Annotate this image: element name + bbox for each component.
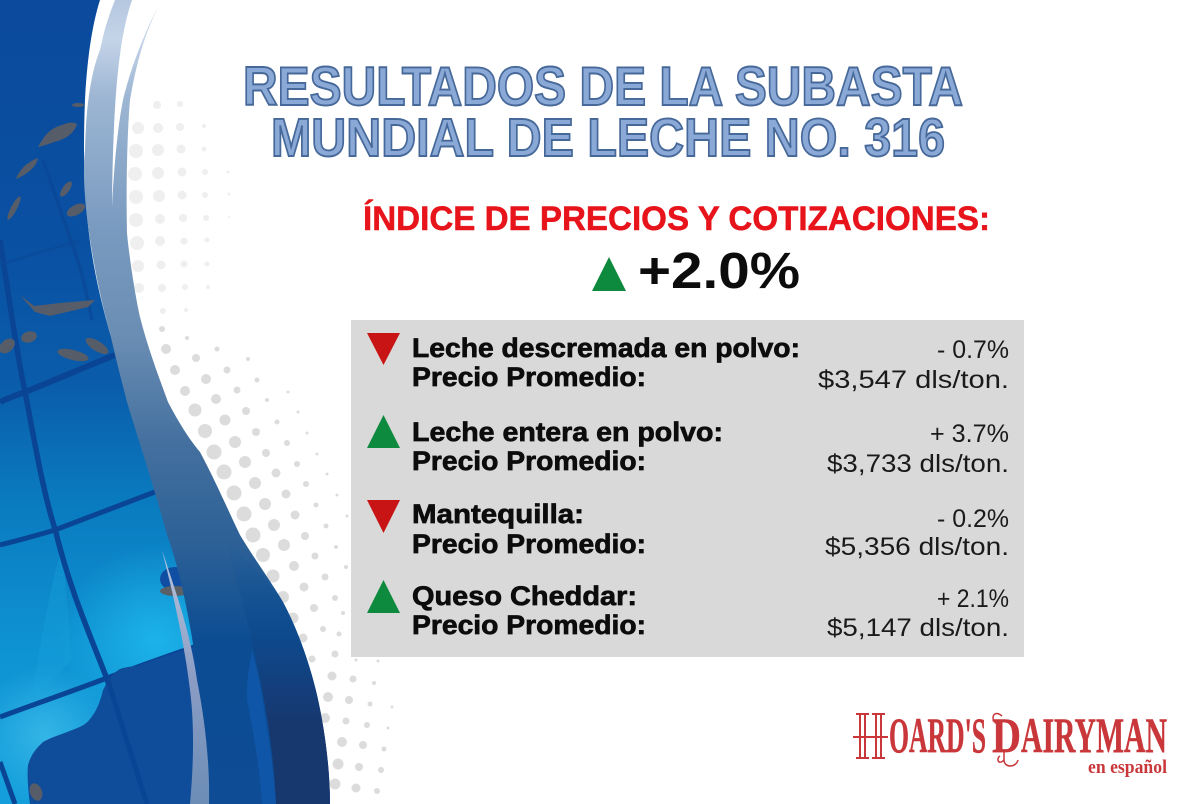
row: leche descremada: Precio Promedio: [412,362,646,392]
icon: green up arrow [367,415,400,448]
title: RESULTADOS DE LA SUBASTA [243,55,963,117]
row: queso cheddar: Queso Cheddar: [412,581,637,611]
row: leche descremada: $3,547 dls/ton. [818,366,1009,394]
icon: green up arrow [592,257,626,291]
landmasses: grey islands [0,103,111,803]
row: leche entera: $3,733 dls/ton. [827,450,1009,478]
globe background [0,0,200,804]
row: leche descremada: Leche descremada en polvo: [412,333,800,363]
row: leche descremada: - 0.7% [937,336,1009,364]
thin pale swoosh [162,550,209,804]
logo: Hoard's Dairyman: OARD'S [889,707,986,763]
row: leche entera [367,415,1009,478]
grid lines of the globe [0,240,194,804]
row: queso cheddar [367,580,1009,642]
title: MUNDIAL DE LECHE NO. 316 [271,108,945,168]
logo: Hoard's Dairyman [853,707,1167,778]
icon: red down arrow [367,333,400,365]
swoosh band [84,0,330,804]
row: queso cheddar: + 2.1% [937,585,1009,613]
small island near the swoosh [160,567,184,596]
lighter blue inner strip [247,650,276,804]
index value: +2.0% [638,242,800,299]
icon: red down arrow [367,500,400,533]
icon: green up arrow [367,580,400,613]
row: leche entera: + 3.7% [930,420,1009,448]
row: mantequilla: Mantequilla: [412,499,584,529]
row: leche entera: Leche entera en polvo: [412,417,723,447]
title [243,55,963,168]
logo: Hoard's Dairyman: D [992,707,1021,763]
row: mantequilla: Precio Promedio: [412,529,646,559]
row: mantequilla: - 0.2% [937,505,1009,533]
heading: price index: ÍNDICE DE PRECIOS Y COTIZACIONES: [363,200,990,238]
row: leche descremada [367,333,1009,394]
panel: product prices [351,320,1024,657]
row: mantequilla [367,499,1009,561]
row: queso cheddar: Precio Promedio: [412,610,646,640]
logo: Hoard's Dairyman: en español [1088,757,1167,778]
row: leche entera: Precio Promedio: [412,446,646,476]
navy outer edge of the band [225,540,330,804]
halftone dot pattern [128,101,394,794]
row: queso cheddar: $5,147 dls/ton. [827,614,1009,642]
row: mantequilla: $5,356 dls/ton. [825,533,1009,561]
continent: bottom landmass [28,650,200,804]
